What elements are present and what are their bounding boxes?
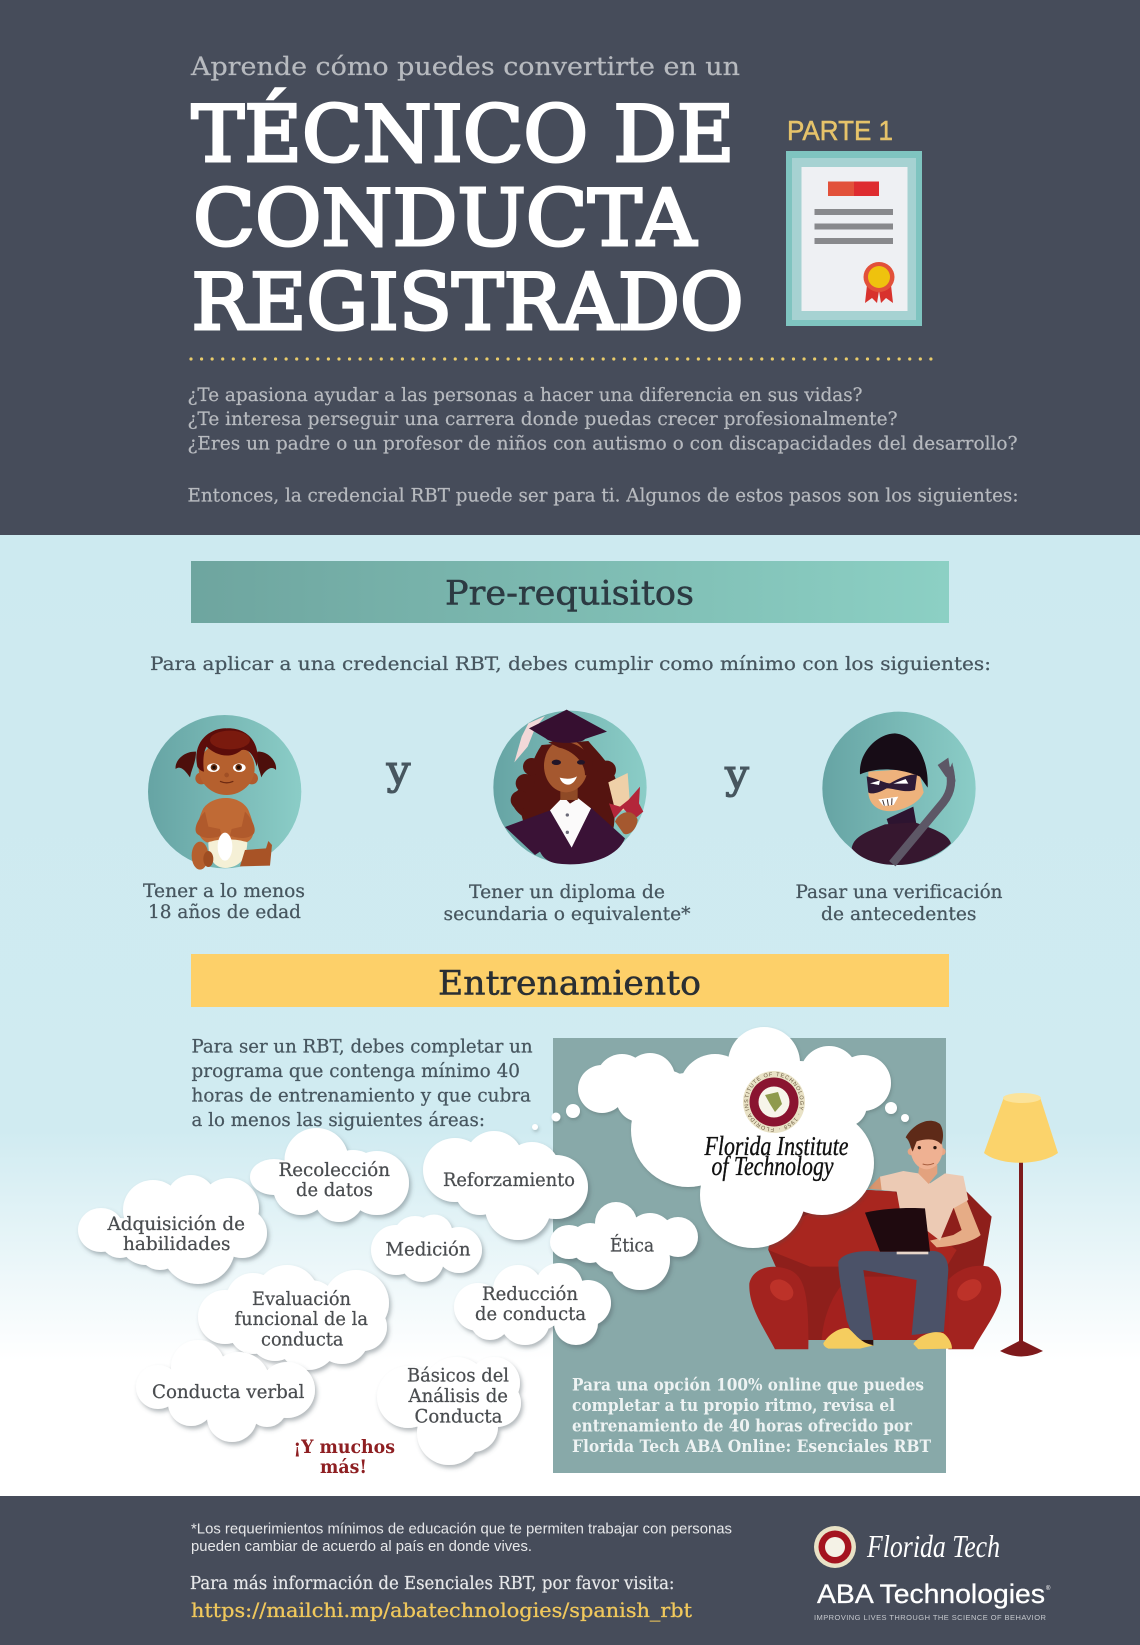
training intro text: horas de entrenamiento y que cubra [192,1084,531,1106]
icon: burglar [822,712,976,865]
logo text: of Technology [712,1151,834,1181]
panel: pre-requisitos [143,561,1002,925]
main title: REGISTRADO [192,258,744,348]
main title [192,88,744,348]
cloud: Medición: Medición [386,1240,471,1260]
cloud: Reducción de conducta: Reducción [482,1284,578,1305]
link text: https://mailchi.mp/abatechnologies/spanish_rbt [191,1598,692,1622]
illustration: man on armchair [749,1121,1001,1349]
logo: ABA Technologies: ® [1046,1585,1051,1592]
online option text: completar a tu propio ritmo, revisa el [572,1396,895,1415]
icon: graduate [493,710,647,864]
lead-in sentence: Entonces, la credencial RBT puede ser para ti. Algunos de estos pasos son los siguientes: [188,484,1018,506]
cloud: Conducta verbal [136,1340,315,1442]
intro questions: ¿Te interesa perseguir una carrera donde puedas crecer profesionalmente? [188,408,898,430]
training intro text: Para ser un RBT, debes completar un [192,1036,532,1058]
logo: Florida Tech [814,1526,1000,1568]
caption: age: 18 años de edad [148,901,301,923]
cloud: Adquisición de habilidades [78,1175,267,1284]
thought cloud: Florida Institute of Technology [532,1027,910,1250]
logo: ABA Technologies: ABA Technologies [817,1579,1045,1609]
online option text: Florida Tech ABA Online: Esenciales RBT [572,1437,932,1456]
logo text [704,1131,849,1181]
logo text: Florida Institute [704,1131,849,1161]
intro questions [188,384,1018,454]
online option text: entrenamiento de 40 horas ofrecido por [572,1416,912,1436]
armchair [749,1190,1001,1349]
training intro text [192,1036,532,1131]
cloud: Medición [371,1214,482,1282]
caption: background check: de antecedentes [821,903,976,925]
icon: institute seal: FLORIDA INSTITUTE OF TECHNOLOGY · 1958 · [744,1072,804,1132]
intro sentence: Para aplicar a una credencial RBT, debes cumplir como mínimo con los siguientes: [150,653,991,675]
panel: entrenamiento [78,954,1058,1478]
online option text: Para una opción 100% online que puedes [572,1376,924,1394]
logo: ABA Technologies: IMPROVING LIVES THROUGH THE SCIENCE OF BEHAVIOR [814,1613,1047,1622]
lamp [984,1093,1058,1356]
heading band: pre-requisitos [191,561,949,623]
cloud: Básicos del Análisis de Conducta: Análisis de [408,1386,508,1407]
cloud: Reducción de conducta [454,1263,611,1345]
cloud: Evaluación funcional de la conducta: Evaluación [252,1289,351,1310]
intro line: Aprende cómo puedes convertirte en un [190,52,740,81]
more info line: Para más información de Esenciales RBT, por favor visita: [190,1574,674,1594]
cloud: Reforzamiento [423,1131,588,1240]
heading band: entrenamiento: Entrenamiento [438,964,701,1004]
caption: diploma: secundaria o equivalente* [444,903,691,925]
connector: y: y [385,748,411,794]
cloud: Adquisición de habilidades: Adquisición de [107,1214,245,1235]
callout: and much more: ¡Y muchos [294,1437,395,1458]
caption: background check: Pasar una verificación [796,881,1002,903]
cloud: Evaluación funcional de la conducta [198,1265,389,1370]
icon: baby [148,715,301,870]
logo: Florida Tech: Florida Tech [866,1528,1000,1564]
cloud: Básicos del Análisis de Conducta: Conducta [414,1406,502,1428]
heading band: entrenamiento [191,954,949,1007]
intro questions: ¿Eres un padre o un profesor de niños con autismo o con discapacidades del desarrollo? [188,432,1018,454]
cloud: Reducción de conducta: de conducta [475,1304,586,1325]
footnote: *Los requerimientos mínimos de educación que te permiten trabajar con personas [191,1522,732,1538]
main title: TÉCNICO DE [192,88,735,180]
training intro text: programa que contenga mínimo 40 [192,1060,520,1082]
training intro text: a lo menos las siguientes áreas: [192,1109,485,1131]
dotted divider [191,357,931,361]
cloud: Recolección de datos [250,1128,409,1222]
cloud: Reforzamiento: Reforzamiento [443,1170,575,1191]
cloud: Conducta verbal: Conducta verbal [152,1382,305,1403]
callout: and much more [294,1437,395,1478]
footer panel [0,1496,1140,1645]
cloud: Recolección de datos: Recolección [278,1160,390,1181]
caption: diploma [444,881,691,925]
cloud: Básicos del Análisis de Conducta [377,1357,521,1465]
heading band: pre-requisitos: Pre-requisitos [445,574,694,614]
body background [0,535,1140,1496]
connector: y: y [724,752,749,798]
cloud: Ética [550,1202,698,1290]
cloud: Evaluación funcional de la conducta: funcional de la [234,1309,368,1330]
callout: and much more: más! [320,1457,367,1478]
cloud: Evaluación funcional de la conducta: conducta [261,1330,344,1350]
caption: diploma: Tener un diploma de [469,881,665,903]
part label: PARTE 1 [787,115,893,146]
intro questions: ¿Te apasiona ayudar a las personas a hacer una diferencia en sus vidas? [188,384,862,406]
man [823,1121,981,1349]
footnote [191,1522,732,1555]
icon: certificate [786,151,922,326]
main title: CONDUCTA [193,174,698,264]
footnote: pueden cambiar de acuerdo al país en donde vives. [191,1539,532,1555]
caption: age: Tener a lo menos [143,880,305,902]
cloud: Adquisición de habilidades: habilidades [123,1234,230,1255]
cloud: Básicos del Análisis de Conducta: Básicos del [407,1366,509,1386]
caption: background check [796,881,1002,925]
logo: ABA Technologies [814,1579,1051,1622]
header panel [0,0,1140,535]
training panel background [553,1038,946,1473]
caption: age [143,880,305,923]
cloud: Recolección de datos: de datos [296,1180,373,1201]
online option text [572,1376,932,1456]
cloud: Ética: Ética [610,1234,654,1256]
